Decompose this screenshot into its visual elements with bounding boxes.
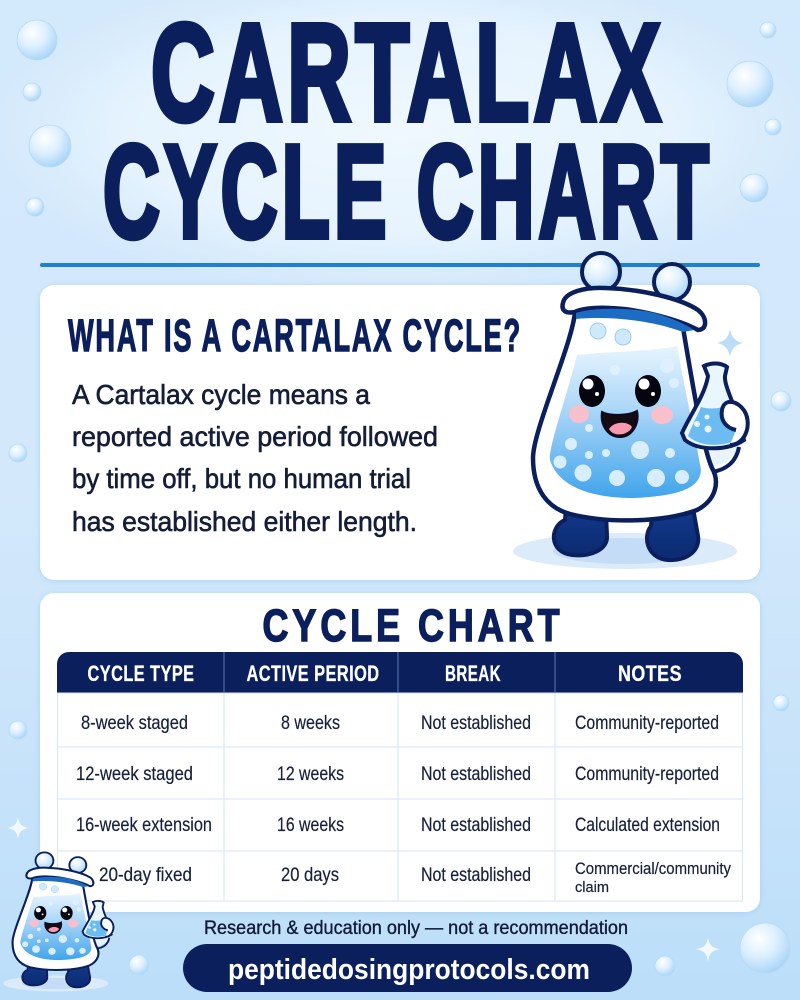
disclaimer: Research & education only — not a recommendation bbox=[204, 918, 628, 939]
table header bbox=[88, 661, 682, 686]
row: 16-week extension bbox=[76, 814, 720, 836]
description text: by time off, but no human trial bbox=[72, 463, 411, 494]
website pill: peptidedosingprotocols.com bbox=[228, 954, 590, 986]
row: 20-day fixed: claim bbox=[575, 879, 609, 896]
row: 8-week staged: 8-week staged bbox=[81, 712, 188, 734]
heading: WHAT IS A CARTALAX CYCLE? bbox=[68, 310, 522, 361]
table header: BREAK bbox=[445, 661, 501, 686]
description text: A Cartalax cycle means a bbox=[72, 379, 370, 410]
row: 12-week staged: 12-week staged bbox=[76, 763, 193, 785]
icon: flask mascot small bbox=[3, 852, 113, 991]
title bbox=[103, 0, 713, 265]
icon: sparkle right bbox=[696, 937, 720, 962]
row: 16-week extension: Calculated extension bbox=[575, 814, 720, 836]
row: 20-day fixed bbox=[99, 859, 731, 896]
description text bbox=[72, 379, 438, 537]
row: 20-day fixed: 20 days bbox=[281, 864, 339, 886]
row: 20-day fixed: 20-day fixed bbox=[99, 864, 192, 886]
row: 20-day fixed: Commercial/community bbox=[575, 859, 731, 878]
icon: sparkle bbox=[717, 329, 743, 357]
description text: reported active period followed bbox=[72, 421, 438, 452]
row: 12-week staged: Community-reported bbox=[575, 763, 719, 785]
icon: sparkle left bbox=[8, 817, 28, 839]
table header: NOTES bbox=[618, 661, 682, 686]
row: 16-week extension: 16-week extension bbox=[76, 814, 212, 836]
row: 16-week extension: Not established bbox=[421, 814, 531, 836]
table bbox=[57, 652, 743, 901]
description text: has established either length. bbox=[72, 506, 417, 537]
title glow bbox=[0, 0, 800, 295]
chart heading: CYCLE CHART bbox=[262, 600, 564, 651]
table header: CYCLE TYPE bbox=[88, 661, 194, 686]
row: 8-week staged: Not established bbox=[421, 712, 531, 734]
icon: flask mascot large bbox=[513, 253, 748, 569]
row: 12-week staged: Not established bbox=[421, 763, 531, 785]
website pill bbox=[183, 944, 632, 992]
row: 12-week staged bbox=[76, 763, 719, 785]
title rule bbox=[40, 263, 760, 267]
row: 8-week staged: 8 weeks bbox=[281, 712, 340, 734]
row: 8-week staged: Community-reported bbox=[575, 712, 719, 734]
panel: cycle chart bbox=[40, 593, 760, 912]
row: 12-week staged: 12 weeks bbox=[277, 763, 344, 785]
row: 20-day fixed: Not established bbox=[421, 864, 531, 886]
panel: what is a cartalax cycle bbox=[40, 285, 760, 580]
row: 8-week staged bbox=[81, 712, 719, 734]
table header: ACTIVE PERIOD bbox=[246, 661, 380, 686]
row: 16-week extension: 16 weeks bbox=[277, 814, 344, 836]
